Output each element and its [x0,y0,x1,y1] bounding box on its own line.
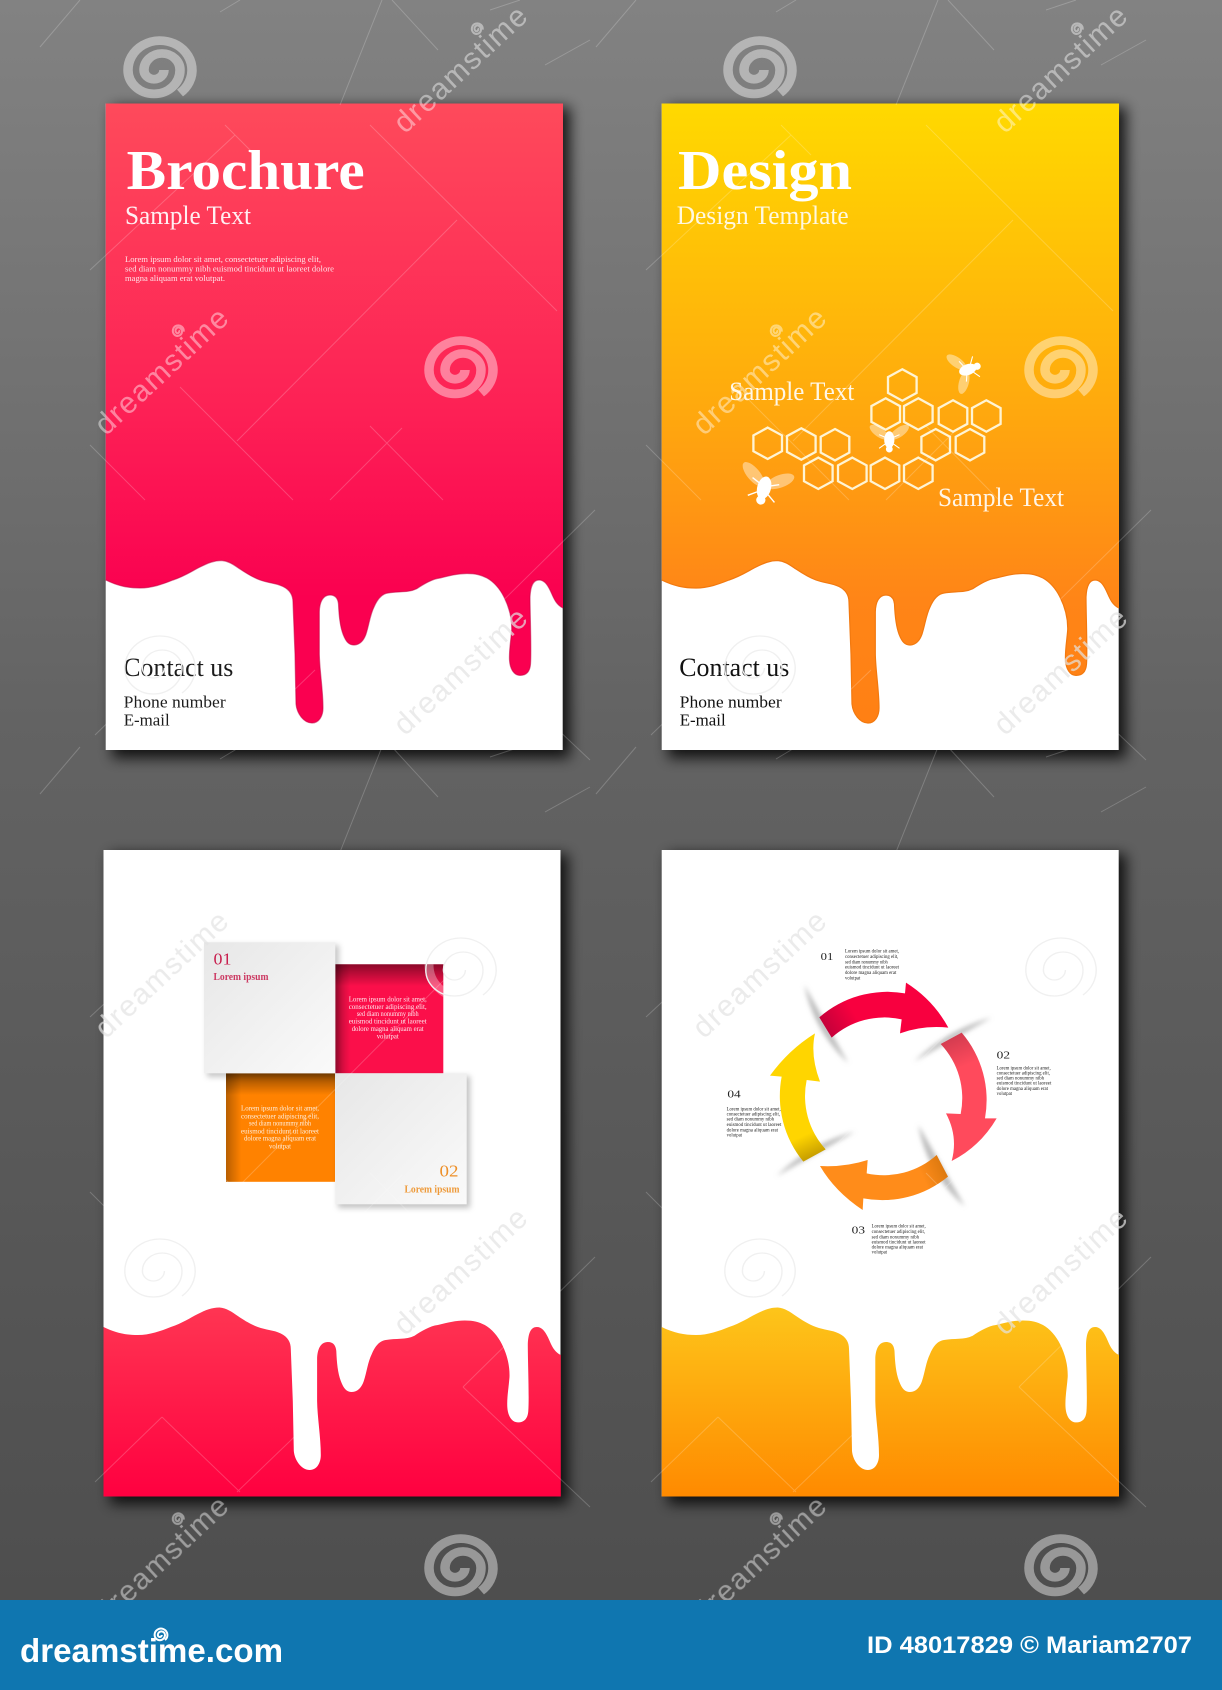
contact block: Contact us [123,653,233,682]
arrow 4 [770,1033,826,1162]
label 04 [727,1090,782,1139]
watermark words: dreamstime [387,1202,534,1342]
label 01 [821,950,900,981]
label 01: dolore magna aliquam erat [845,971,897,976]
label 01: volutpat [845,976,861,981]
yellow footer drip [662,1308,1119,1496]
label 02: volutpat [997,1092,1013,1097]
red square with text: consectetuer adipiscing elit, [349,1002,427,1011]
label 01: 01 [821,952,833,963]
panel: squares layout [104,850,561,1496]
pink paint drip [106,104,563,723]
sample text lower: Sample Text [938,483,1065,512]
orange square with text: sed diam nonummy nibh [249,1119,311,1128]
label 03: consectetuer adipiscing elit, [872,1230,925,1235]
arrow diagram [727,950,1052,1256]
watermark words: dreamstime [88,302,235,442]
subtitle: Design Template [677,201,849,230]
red square with text: euismod tincidunt ut laoreet [349,1016,428,1026]
label 01: consectetuer adipiscing elit, [845,955,898,960]
footer logo: dreamstime.com [20,1632,283,1669]
red square with text: sed diam nonummy nibh [357,1009,419,1018]
watermark words: dreamstime [88,1490,235,1630]
white card 02: 02 [440,1162,458,1181]
label 02: dolore magna aliquam erat [997,1087,1049,1092]
watermark words: dreamstime [88,905,235,1045]
body text: sed diam nonummy nibh euismod tincidunt ut laoreet dolore [125,264,334,274]
honeycomb [753,369,1001,489]
watermark words: dreamstime [387,602,534,742]
label 02: Lorem ipsum dolor sit amet, [997,1066,1051,1071]
orange square with text [226,1073,335,1182]
red square with text: Lorem ipsum dolor sit amet, [349,995,427,1004]
watermark faint spirals on white [125,636,1096,1297]
label 02: consectetuer adipiscing elit, [997,1072,1050,1077]
orange square with text: volutpat [269,1141,292,1150]
arrow 3 [820,1155,948,1210]
panel: brochure cover [106,104,563,750]
image id credit: ID 48017829 © Mariam2707 [867,1632,1192,1659]
label 04: Lorem ipsum dolor sit amet, [727,1107,781,1112]
footer band [0,1600,1222,1690]
white card 02 [335,1073,470,1208]
orange square with text: consectetuer adipiscing elit, [241,1111,319,1120]
watermark words: dreamstime [987,1202,1134,1342]
body text: magna aliquam erat volutpat. [125,273,225,283]
contact block: Contact us [679,653,789,682]
label 01: sed diam nonummy nibh [845,960,888,965]
watermark words: dreamstime [686,905,833,1045]
label 02: sed diam nonummy nibh [997,1077,1044,1082]
label 04: dolore magna aliquam erat [727,1128,779,1133]
label 03 [852,1225,926,1256]
red square with text [335,964,444,1074]
label 04: volutpat [727,1134,743,1139]
label 01: euismod tincidunt ut laoreet [845,966,900,971]
icon: bee centre [867,422,911,453]
sample text upper: Sample Text [729,377,855,406]
contact block [679,653,789,730]
label 02 [997,1050,1052,1097]
arrow 1 [819,983,948,1038]
label 03: dolore magna aliquam erat [872,1246,924,1251]
arrow 2 [941,1033,997,1161]
fold shadows [777,985,992,1207]
white card 02: Lorem ipsum [404,1185,460,1196]
pink footer drip [104,1308,561,1496]
white card 01: 01 [214,950,232,968]
contact block: Phone number [680,692,782,712]
watermark spirals [128,41,1093,1592]
red square with text: dolore magna aliquam erat [352,1024,425,1033]
body text [125,254,334,283]
label 04: euismod tincidunt ut laoreet [727,1123,782,1128]
panel: circular arrows [662,850,1119,1496]
watermark words: dreamstime [686,1490,833,1630]
label 01: Lorem ipsum dolor sit amet, [845,950,899,955]
white card 01 [204,942,339,1077]
subtitle: Sample Text [125,201,252,230]
label 03: volutpat [872,1251,888,1256]
orange square with text: Lorem ipsum dolor sit amet, [241,1104,319,1113]
watermark words: dreamstime [987,0,1134,140]
title: Brochure [127,140,365,202]
watermark words: dreamstime [686,302,833,442]
label 03: euismod tincidunt ut laoreet [872,1240,926,1245]
contact block: Phone number [124,692,226,712]
label 03: sed diam nonummy nibh [872,1235,919,1240]
label 04: sed diam nonummy nibh [727,1118,774,1123]
label 03: 03 [852,1225,865,1236]
panel: design cover [662,104,1119,750]
contact block [123,653,233,730]
orange square with text: euismod tincidunt ut laoreet [241,1126,320,1135]
watermark words: dreamstime [987,602,1134,742]
contact block: E-mail [124,710,170,730]
panel shadows [110,107,1126,1504]
label 04: 04 [727,1090,741,1101]
white card 01: Lorem ipsum [214,972,269,983]
body text: Lorem ipsum dolor sit amet, consectetuer adipiscing elit, [125,254,321,264]
label 02: 02 [997,1050,1010,1061]
title: Design [678,140,852,202]
orange square with text: dolore magna aliquam erat [244,1134,317,1143]
icon: bee top right [942,343,988,398]
red square with text: volutpat [377,1031,400,1040]
watermark words: dreamstime [387,0,534,140]
label 03: Lorem ipsum dolor sit amet, [872,1225,926,1230]
label 02: euismod tincidunt ut laoreet [997,1082,1052,1087]
icon: bee lower left [731,457,799,512]
label 04: consectetuer adipiscing elit, [727,1113,780,1118]
contact block: E-mail [680,710,726,730]
honey drip [662,104,1119,723]
